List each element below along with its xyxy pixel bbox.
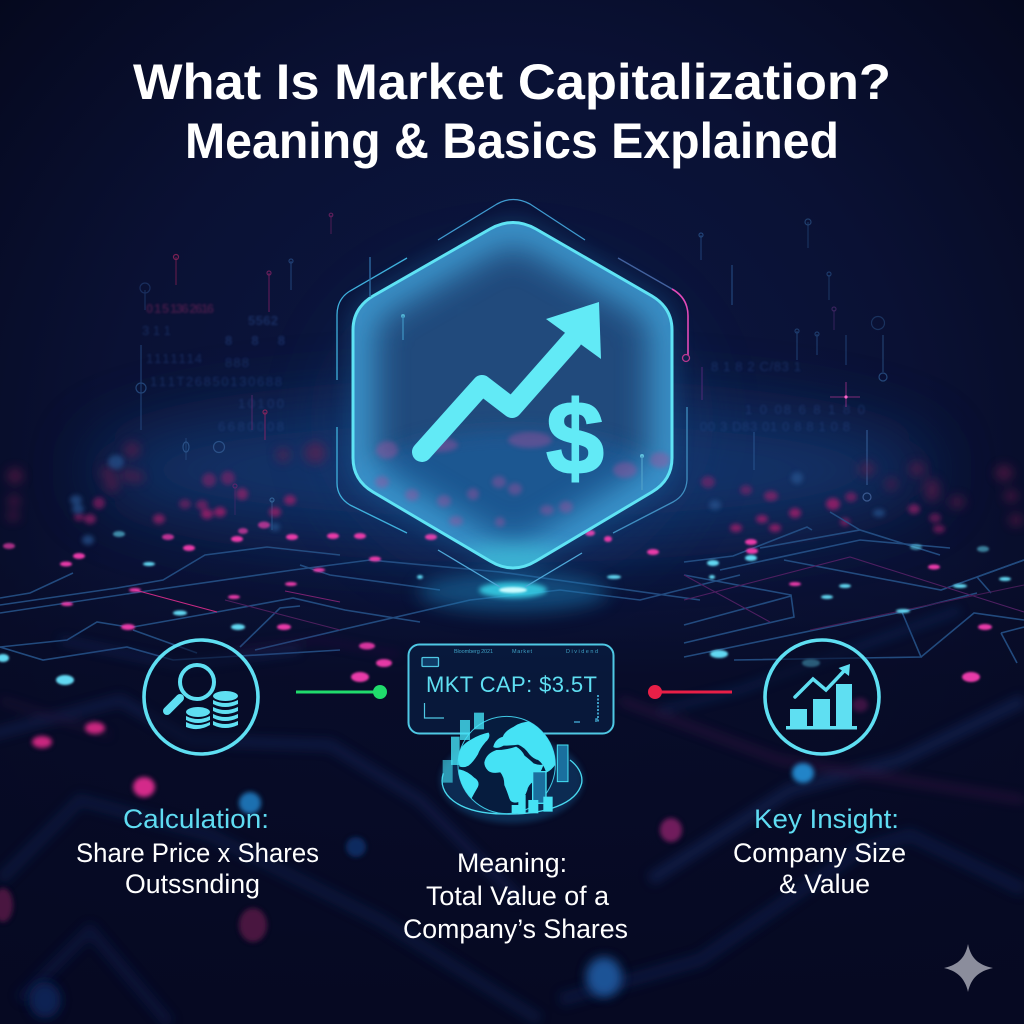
foreground bokeh dots [0,698,868,1018]
icon: rising arrow [422,302,601,452]
background data columns: 5562 [248,313,278,328]
background data columns: 8 8 8 [225,333,285,348]
background data columns: 8 8 8 [225,355,249,370]
icon: sparkle watermark [944,944,993,992]
text: calculation: Share Price x Shares [76,838,319,868]
pink circuit traces [135,557,1024,630]
text: key insight: Key Insight: [754,804,899,834]
sharp pink and cyan nodes [0,522,1011,685]
background data columns: 3 1 1 [142,323,171,338]
background data columns [142,301,865,434]
background data columns: 00 3 D83 01 0 8 8 1 0 8 [700,419,850,434]
skyline buildings [443,713,568,813]
market cap value: MKT CAP: $3.5T [426,672,597,697]
text: key insight: Company Size [733,838,906,868]
text: meaning [403,848,628,944]
icon: magnifier and coins in circle [144,640,258,754]
card header microtext [454,649,598,655]
card header microtext: Market [512,649,532,655]
title: What Is Market Capitalization? [133,54,891,110]
text: meaning: Total Value of a [426,881,610,911]
right connector [648,685,732,699]
background data columns: 1 0 08 6 8 1 8 0 [745,402,865,417]
blurred glowing dots [7,442,1023,545]
central hexagon emblem [337,200,690,612]
text: meaning: Company’s Shares [403,914,628,944]
background data columns: 8 1 8 2 C/83 1 [711,359,801,374]
blurred foreground bands [0,610,1024,1024]
sparkle [830,382,860,407]
text: calculation: Outssnding [125,869,260,899]
base light glow [418,572,608,612]
text: key insight: & Value [779,869,870,899]
title [133,54,891,169]
background data columns: 6 6 8 0 0 0 8 [218,419,284,434]
market cap card [408,644,614,734]
background data columns: 1 1 1 1 1 1 4 [146,351,202,366]
text: key insight [733,804,906,899]
hexagon glass body [354,224,670,566]
card header microtext: Dividend [566,649,598,655]
card header microtext: Bloomberg 2021 [454,649,493,655]
background data columns: 1 1 1 T 2 6 8 5 0 1 3 0 6 8 8 [150,374,282,389]
text: calculation: Calculation: [123,804,269,834]
text: meaning: Meaning: [457,848,567,878]
title: Meaning & Basics Explained [185,113,839,169]
background data columns: 1 0 1 0 0 [238,396,284,411]
circuit board lines [0,512,1024,663]
outer bracket lines [337,200,690,587]
hexagon outline [353,222,672,568]
icon: bar chart in circle [765,640,879,754]
left connector [296,685,387,699]
icon: globe with skyline [440,713,583,823]
text: calculation [76,804,319,899]
background pins [136,213,887,530]
hexagon outer glow [353,222,672,568]
background data columns: 0 1 5 136 2616 [146,301,214,316]
icon: dollar sign: $ [546,381,604,497]
